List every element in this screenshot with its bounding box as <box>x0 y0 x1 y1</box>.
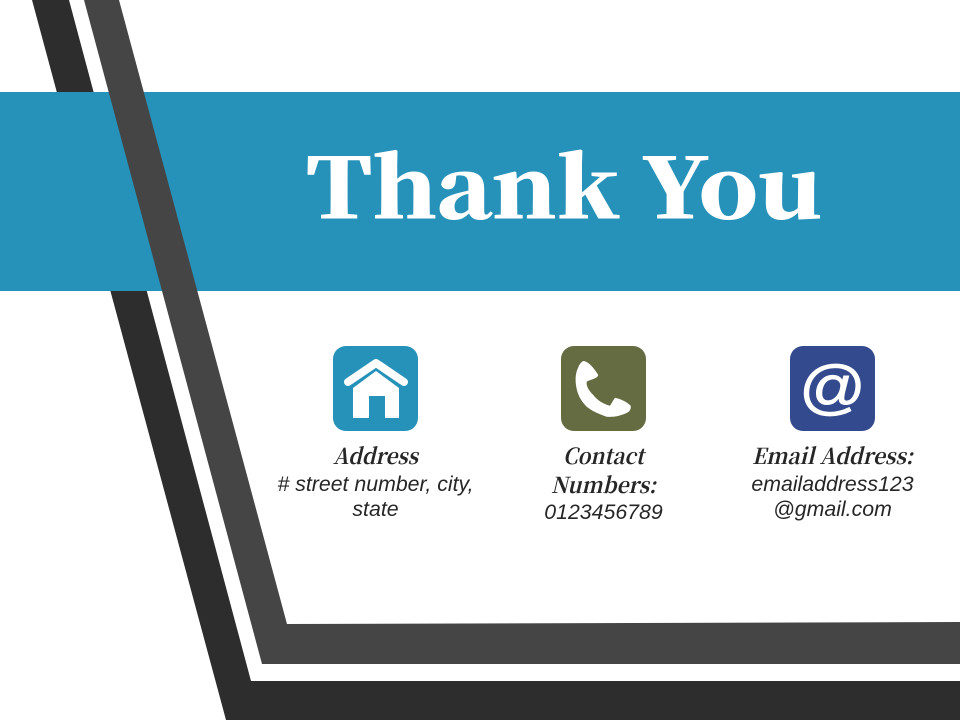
contact: phone numbers <box>544 440 663 524</box>
icon: house <box>333 346 418 431</box>
title banner <box>0 92 960 291</box>
icon: at sign <box>790 346 875 431</box>
contact: address <box>277 440 474 521</box>
contact: address: state <box>352 497 399 521</box>
contact: email address: Email Address: <box>752 440 915 471</box>
icon: telephone <box>561 346 646 431</box>
contact: phone numbers: Numbers: <box>551 469 658 500</box>
contact: phone numbers: Contact <box>563 440 646 471</box>
contact: phone numbers: 0123456789 <box>544 500 663 524</box>
contact: email address: emailaddress123 <box>751 472 914 496</box>
title: Thank You <box>306 125 822 242</box>
contact: address: # street number, city, <box>277 472 474 496</box>
contact: email address <box>751 440 915 521</box>
contact: email address: @gmail.com <box>773 497 892 521</box>
contact: address: Address <box>333 440 420 471</box>
icon: at sign: @ <box>799 354 866 421</box>
